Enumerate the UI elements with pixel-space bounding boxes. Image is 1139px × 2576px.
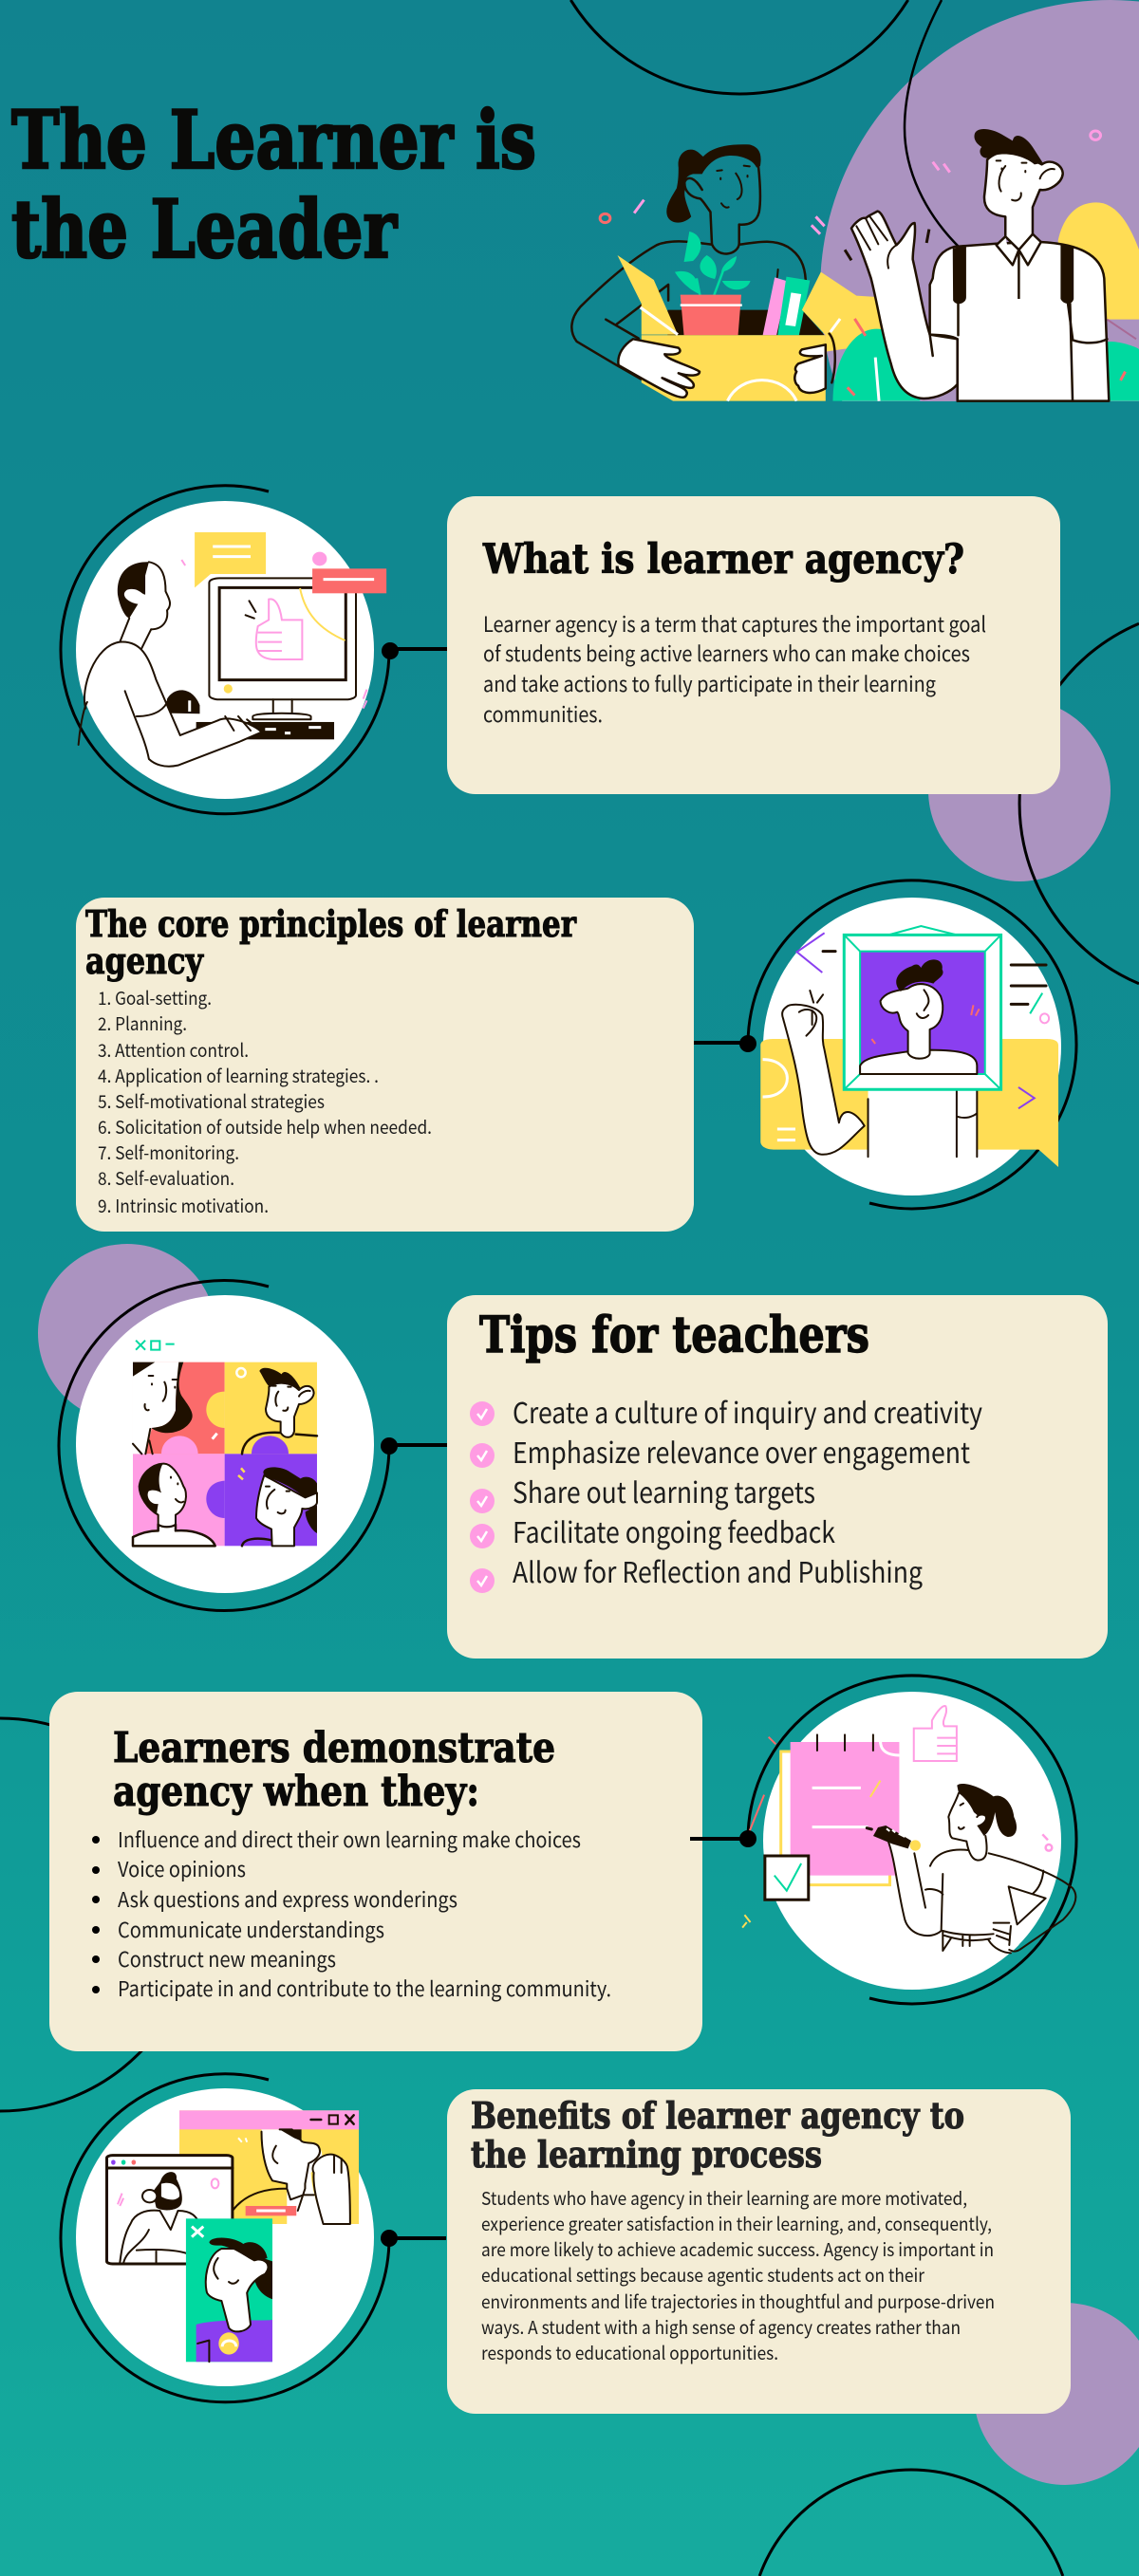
body text: are more likely to achieve academic success. Agency is important in [481,2236,994,2262]
face: bottom left [133,1464,215,1546]
circle ring [748,1676,1076,2004]
body text: educational settings because agentic students act on their [481,2262,925,2288]
tip list: Allow for Reflection and Publishing [513,1549,923,1591]
section 4: learners demonstrate agency [49,1676,1076,2051]
list text: Voice opinions [118,1853,246,1883]
numbered list: 8. Self-evaluation. [98,1165,234,1191]
circle ring [748,880,1076,1209]
white circle [76,1295,374,1593]
list text: Participate in and contribute to the learning community. [118,1973,611,2003]
face: top left [133,1362,217,1454]
window controls [136,1341,175,1350]
tip list: Share out learning targets [513,1470,815,1511]
decorative purple circle: right of first card [928,699,1111,881]
decorative arc: left [0,1718,196,2111]
numbered list: 2. Planning. [98,1010,187,1036]
icon: puzzle of four faces [133,1362,317,1546]
connector [381,2230,446,2247]
body text: Students who have agency in their learning are more motivated, [481,2185,967,2211]
list text: Ask questions and express wonderings [118,1883,457,1914]
circle ring [59,1281,389,1611]
heading: The core principles of learner [85,902,577,945]
yellow bush [1058,202,1139,320]
body text: of students being active learners who can make choices [483,638,970,668]
body text: experience greater satisfaction in their learning, and, consequently, [481,2211,992,2236]
numbered list: 4. Application of learning strategies. . [98,1063,379,1088]
heading: What is learner agency? [482,536,964,584]
heading: Learners demonstrate [113,1724,555,1772]
books [763,269,810,335]
body text: ways. A student with a high sense of agency creates rather than [481,2314,961,2340]
green bushes [832,329,1139,401]
list text [118,1824,611,2003]
numbered list: 6. Solicitation of outside help when needed. [98,1114,432,1140]
decorative arc: top [570,0,908,94]
heading [113,1724,555,1816]
body text: Learner agency is a term that captures the important goal [483,608,986,639]
connector [382,642,447,659]
card background [49,1692,702,2051]
white circle [76,501,374,799]
icon: person at computer [79,532,386,767]
connector [381,1437,447,1455]
section 1: what is learner agency [61,486,1060,814]
list text: Construct new meanings [118,1943,336,1974]
confetti [600,131,1126,396]
title: the Leader [11,182,398,276]
heading: Tips for teachers [479,1307,869,1364]
connector [690,1830,756,1847]
decorative purple circle: header [820,0,1139,401]
circle ring [61,486,389,814]
decorative arc: bottom [759,2470,1063,2576]
card background [76,898,694,1232]
decorative arc: top right [905,0,959,247]
body text: communities. [483,698,603,729]
box interior [667,310,825,335]
decorative purple circle: left of tips [38,1244,216,1422]
body text [483,608,986,729]
title [11,93,536,276]
heading: the learning process [471,2133,822,2176]
box [618,255,884,401]
decorative purple circle: bottom right [974,2303,1139,2485]
potted plant [675,232,751,335]
white circle [76,2088,374,2386]
numbered list: 1. Goal-setting. [98,985,212,1010]
title: The Learner is [11,93,536,187]
tip list [513,1390,982,1591]
numbered list: 9. Intrinsic motivation. [98,1193,269,1218]
card background [447,1295,1108,1659]
circle ring [61,2074,389,2402]
tip checkmarks [477,1409,487,1585]
heading [471,2094,964,2176]
tip bullets [470,1401,495,1593]
man [851,129,1109,401]
numbered list: 5. Self-motivational strategies [98,1088,325,1114]
woman [571,144,806,398]
heading: Benefits of learner agency to [471,2094,964,2137]
decorative arc: right [1019,623,1139,984]
numbered list: 7. Self-monitoring. [98,1140,239,1165]
numbered list [98,985,432,1218]
card background [447,496,1060,794]
icon: man in picture frame [760,926,1058,1167]
section 5: benefits [61,2074,1071,2414]
tip list: Facilitate ongoing feedback [513,1510,835,1551]
connector [694,1035,756,1052]
body text: and take actions to fully participate in their learning [483,668,936,698]
tip list: Create a culture of inquiry and creativity [513,1390,982,1432]
face: top right [236,1368,317,1454]
card background [447,2089,1071,2414]
section 3: tips for teachers [59,1281,1108,1659]
white circle [763,898,1061,1195]
face: bottom right [238,1467,317,1546]
tip list: Emphasize relevance over engagement [513,1430,970,1472]
numbered list: 3. Attention control. [98,1037,249,1063]
icon: woman writing [867,1784,1075,1953]
icon: notepad and thumbs up [742,1706,957,1928]
heading [85,902,577,982]
section 2: core principles [76,880,1076,1232]
hands [618,339,826,398]
bullet list [92,1824,611,2003]
list text: Influence and direct their own learning make choices [118,1824,581,1854]
body text: responds to educational opportunities. [481,2340,778,2365]
bullets [92,1836,100,1993]
icon: video call windows [106,2110,359,2362]
list text: Communicate understandings [118,1914,384,1944]
body text: environments and life trajectories in thoughtful and purpose-driven [481,2289,995,2314]
heading: agency [85,939,204,982]
body text [481,2185,995,2365]
heading: agency when they: [113,1768,479,1816]
white circle [763,1692,1061,1990]
header illustration: woman with box and waving man [571,129,1139,401]
